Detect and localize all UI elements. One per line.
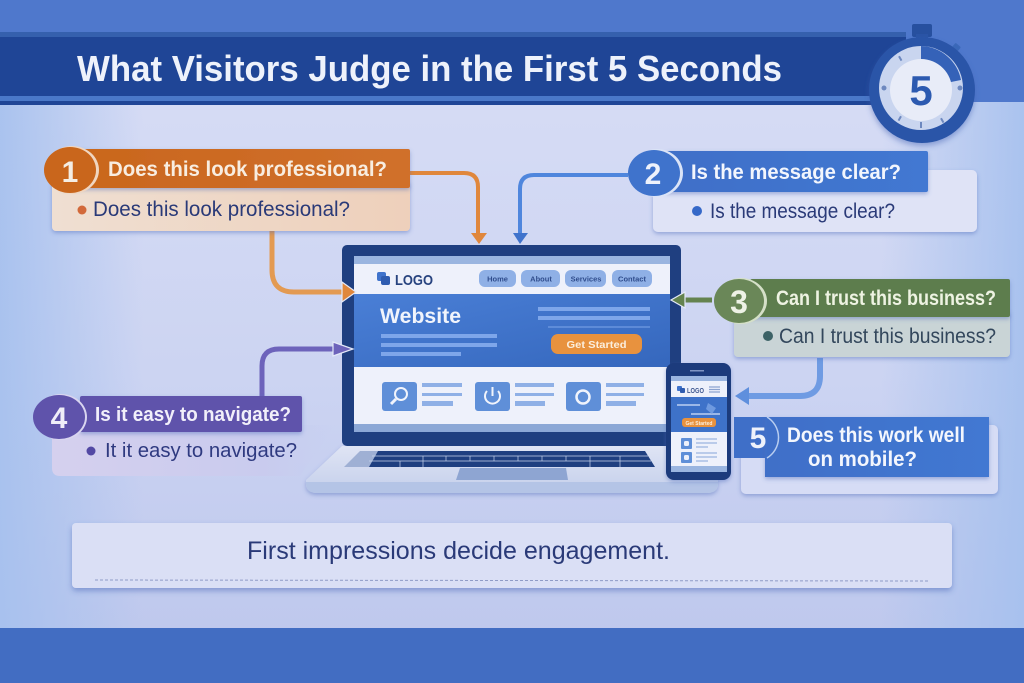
number badge 4: 4 [51, 402, 68, 435]
panel: card 2 [628, 149, 977, 232]
phone: LOGO [687, 388, 704, 395]
panel: card 1 [44, 146, 410, 231]
arrow: card 3 to laptop [671, 292, 712, 308]
laptop screen frame [342, 245, 681, 446]
navigation: Services [571, 274, 601, 284]
takeaway text: First impressions decide engagement. [247, 537, 670, 565]
number badge 1 [44, 146, 99, 194]
laptop [306, 245, 718, 493]
panel: card 5 [734, 417, 998, 494]
top band [0, 0, 1024, 102]
panel: takeaway [72, 523, 952, 588]
arrow: card 1 to laptop top [410, 173, 487, 244]
logo: LOGO [395, 272, 433, 289]
number 5: 5 [750, 422, 766, 455]
heading 2: Is the message clear? [691, 161, 901, 184]
navigation: Home [487, 274, 508, 284]
heading 5: Does this work well [787, 424, 965, 447]
arrow: card 4 to laptop [262, 342, 353, 398]
arrow: card 2 to laptop top [513, 175, 628, 244]
number badge 1: 1 [62, 156, 78, 189]
title banner [0, 32, 906, 105]
text 4: It it easy to navigate? [105, 440, 297, 462]
text 3: Can I trust this business? [779, 325, 996, 348]
arrow: card 3 to phone [735, 358, 820, 405]
heading 1: Does this look professional? [108, 158, 387, 181]
number badge 3: 3 [730, 284, 748, 320]
icon: stopwatch [869, 24, 975, 143]
text 2: Is the message clear? [710, 200, 895, 223]
number badge 4 [33, 394, 87, 440]
logo [377, 272, 433, 289]
arrow: card 1 to laptop side [272, 231, 356, 302]
phone: Get Started [686, 421, 712, 427]
text 1: Does this look professional? [93, 198, 350, 221]
website mockup [354, 256, 670, 432]
icon: refresh [566, 382, 601, 411]
navigation: Contact [618, 274, 646, 284]
bottom band [0, 628, 1024, 683]
icon: power [475, 382, 510, 411]
navigation: About [530, 274, 552, 284]
laptop base [306, 446, 718, 493]
number badge 3 [714, 278, 767, 324]
heading 5 [787, 424, 965, 471]
button [551, 334, 642, 354]
title: What Visitors Judge in the First 5 Seconds [77, 48, 782, 89]
button: Get Started [566, 339, 626, 351]
panel: card 3 [714, 278, 1010, 357]
navigation [479, 270, 652, 287]
icon: search [382, 382, 417, 411]
panel: card 4 [33, 394, 335, 476]
heading 5: on mobile? [808, 448, 917, 471]
icon: stopwatch: 5 [909, 67, 933, 114]
heading 4: Is it easy to navigate? [95, 404, 291, 426]
number badge 2: 2 [645, 158, 661, 191]
phone [666, 363, 731, 480]
number badge 2 [628, 149, 683, 197]
hero heading: Website [380, 305, 461, 328]
